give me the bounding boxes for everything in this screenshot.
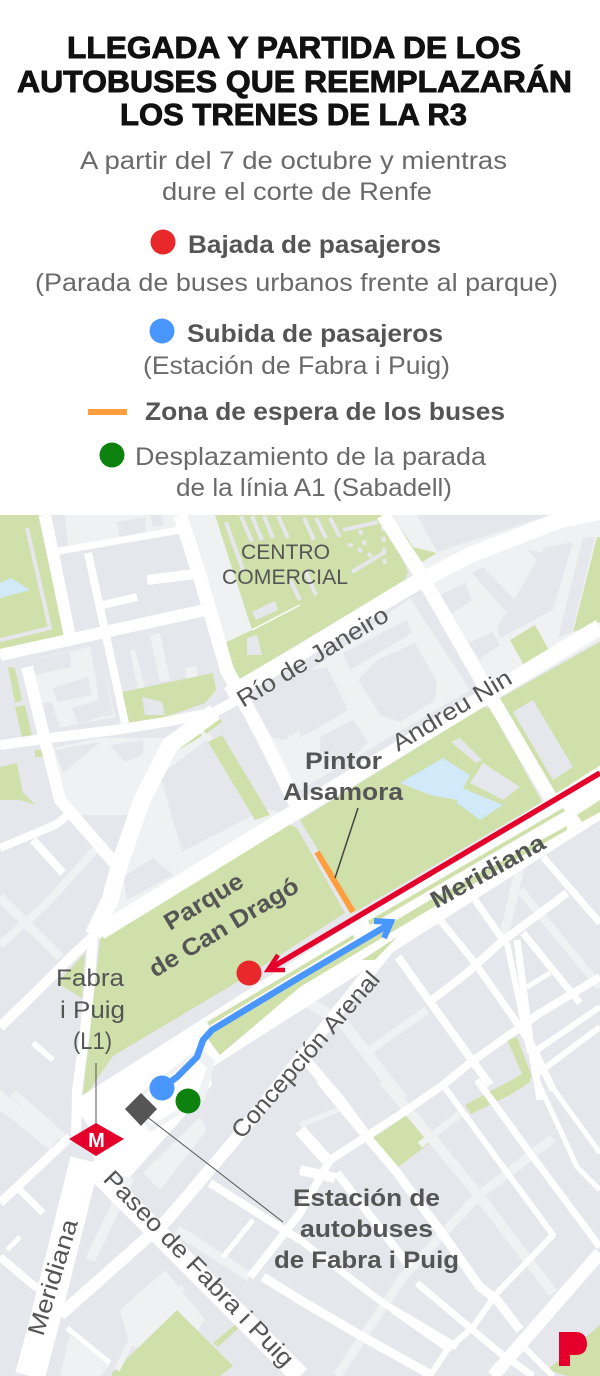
legend item: bajada de pasajeros: Bajada de pasajeros <box>188 231 441 259</box>
label: Pintor Alsamora <box>283 748 404 806</box>
light lots <box>0 515 600 1376</box>
legend item: desplazamiento: Desplazamiento de la parada <box>135 443 486 471</box>
legend item: bajada de pasajeros <box>35 230 558 297</box>
water and park buildings <box>0 528 573 820</box>
label: Pintor Alsamora: Alsamora <box>283 779 404 806</box>
map <box>0 512 600 1376</box>
leader line: Fabra i Puig L1 <box>95 1063 97 1125</box>
legend item: subida de pasajeros: Subida de pasajeros <box>187 320 443 348</box>
legend item: subida de pasajeros: (Estación de Fabra i Puig) <box>143 352 450 380</box>
map base <box>0 515 600 1376</box>
label: centro comercial <box>222 541 348 589</box>
light bus station ground <box>130 1048 215 1132</box>
label: Fabra i Puig L1: (L1) <box>73 1028 112 1055</box>
metro marker <box>69 1123 124 1156</box>
leader line: bus station <box>146 1116 283 1222</box>
legend item: desplazamiento: de la línia A1 (Sabadell) <box>176 474 452 502</box>
label: Parque de Can Dragó: Parque <box>159 868 249 936</box>
label: Estación de autobuses: de Fabra i Puig <box>274 1247 459 1274</box>
white streets <box>0 512 600 1376</box>
subtitle <box>80 147 507 206</box>
label: Concepción Arenal: Concepción Arenal <box>226 966 386 1144</box>
legend item: desplazamiento <box>100 442 486 502</box>
label: Andreu Nin: Andreu Nin <box>387 664 517 757</box>
bus station marker <box>125 1093 157 1126</box>
metro marker: M <box>88 1130 105 1152</box>
map labels <box>23 541 551 1373</box>
orange waiting zone <box>317 852 353 912</box>
title: AUTOBUSES QUE REEMPLAZARÁN <box>17 64 572 99</box>
title: LLEGADA Y PARTIDA DE LOS <box>67 30 521 65</box>
green stop marker <box>176 1088 200 1114</box>
blue route arrow <box>162 921 391 1088</box>
legend <box>35 230 558 502</box>
label: Río de Janeiro: Río de Janeiro <box>232 601 394 713</box>
label: Estación de autobuses: autobuses <box>300 1216 433 1243</box>
legend item: bajada de pasajeros: (Parada de buses urbanos frente al parque) <box>35 269 558 297</box>
shopping centre parking pattern <box>226 516 385 600</box>
label: centro comercial: CENTRO <box>241 541 330 564</box>
red stop marker <box>236 960 262 986</box>
title <box>17 30 572 132</box>
blue stop marker <box>150 1076 174 1100</box>
buildings on lots <box>30 515 595 900</box>
legend item: subida de pasajeros <box>143 318 450 380</box>
label: Pintor Alsamora: Pintor <box>305 748 382 775</box>
light streets <box>0 850 600 1376</box>
leader line: Pintor Alsamora <box>335 808 358 878</box>
label: Meridiana south: Meridiana <box>23 1215 84 1339</box>
red route arrow <box>268 773 600 970</box>
label: Fabra i Puig L1 <box>56 965 125 1055</box>
label: Meridiana avenue: Meridiana <box>426 829 551 914</box>
parks <box>0 515 600 1376</box>
label: centro comercial: COMERCIAL <box>222 566 348 589</box>
label: Fabra i Puig L1: i Puig <box>60 997 125 1024</box>
label: Estación de autobuses <box>274 1185 459 1274</box>
meridiana green strips <box>207 800 600 1055</box>
title: LOS TRENES DE LA R3 <box>120 97 467 132</box>
label: Estación de autobuses: Estación de <box>293 1185 440 1212</box>
subtitle: dure el corte de Renfe <box>162 178 432 206</box>
subtitle: A partir del 7 de octubre y mientras <box>80 147 507 175</box>
legend item: zona de espera: Zona de espera de los buses <box>145 398 505 426</box>
label: Fabra i Puig L1: Fabra <box>56 965 125 992</box>
label: Paseo de Fabra i Puig: Paseo de Fabra i Puig <box>98 1165 299 1373</box>
logo <box>559 1332 587 1366</box>
label: Parque de Can Dragó: de Can Dragó <box>144 872 304 983</box>
